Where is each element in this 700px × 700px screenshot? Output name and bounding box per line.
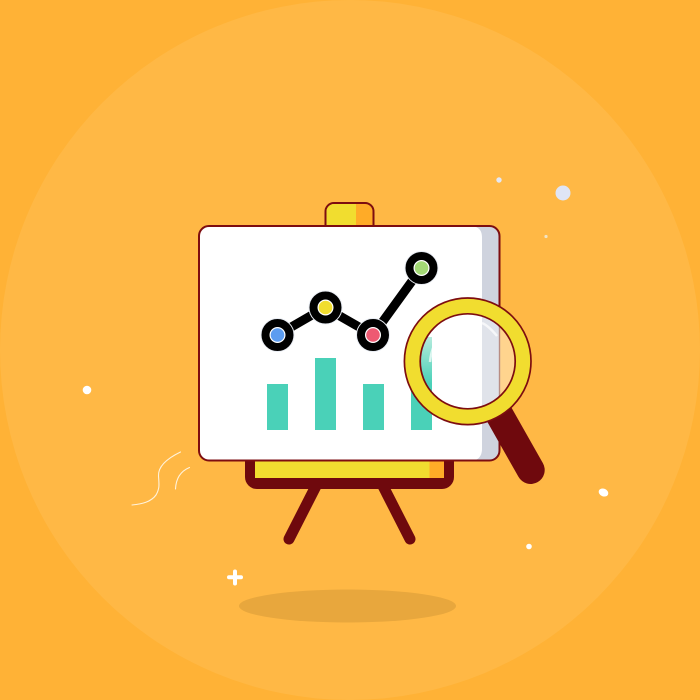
easel leg right [383, 486, 410, 539]
icon: plus sparkle [229, 572, 241, 584]
node blue [261, 318, 294, 352]
tray orange fill [430, 458, 444, 478]
tray yellow fill [255, 458, 430, 478]
ring inner outline [420, 314, 515, 409]
node yellow [309, 291, 342, 324]
node red [356, 318, 390, 352]
floor shadow [239, 590, 456, 622]
ring outer outline [404, 298, 531, 425]
node green [405, 252, 438, 284]
board outline [199, 226, 500, 460]
easel stand [245, 455, 454, 539]
easel leg left [289, 486, 316, 539]
line chart [261, 252, 438, 352]
decorative curved lines [132, 452, 190, 505]
magnifying glass [404, 298, 531, 470]
decorative sparkles [83, 177, 610, 549]
magnifier handle [495, 407, 531, 470]
easel tray [245, 455, 454, 489]
bar chart [267, 337, 432, 430]
lens contents [421, 317, 514, 406]
presentation board [199, 226, 500, 461]
board grey side [472, 226, 500, 461]
magnifier yellow ring [412, 306, 523, 417]
board top tab [325, 203, 374, 228]
